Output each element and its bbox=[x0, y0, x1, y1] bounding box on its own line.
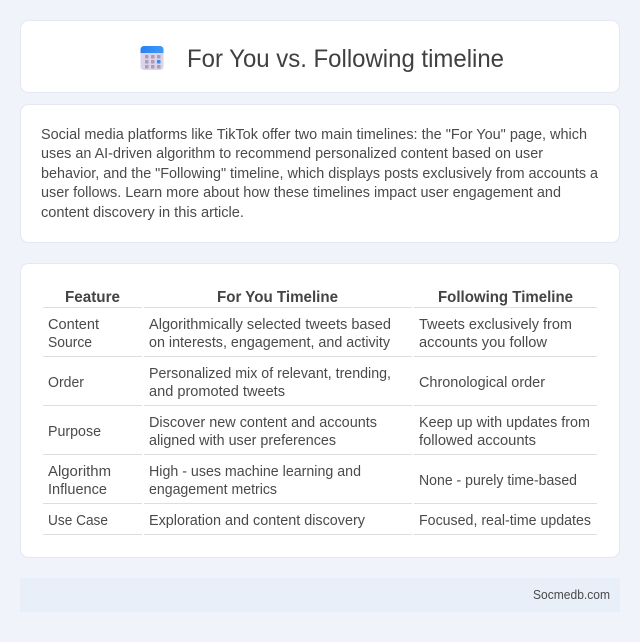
row: content source: Tweets exclusively from bbox=[419, 317, 572, 333]
row: content source: accounts you follow bbox=[419, 335, 548, 351]
row: purpose: Keep up with updates from bbox=[419, 415, 590, 431]
row: order: Personalized mix of relevant, trending, bbox=[149, 366, 391, 382]
description text: Social media platforms like TikTok offer two main timelines: the "For You" page, which bbox=[41, 126, 587, 143]
row: content source: Source bbox=[48, 335, 92, 351]
row: use case: Use Case bbox=[48, 513, 108, 529]
row: algorithm influence: engagement metrics bbox=[149, 482, 277, 498]
description text bbox=[41, 126, 599, 221]
footer: Socmedb.com bbox=[533, 588, 610, 602]
row: algorithm influence: Algorithm bbox=[48, 464, 111, 480]
row: purpose: followed accounts bbox=[419, 433, 536, 449]
row: order bbox=[48, 366, 545, 400]
description text: content discovery in this article. bbox=[41, 204, 244, 221]
icon: calendar bbox=[140, 46, 164, 70]
row: purpose: Discover new content and accounts bbox=[149, 415, 377, 431]
description text: behavior, and the "Following" timeline, which displays posts exclusively from accounts a bbox=[41, 165, 599, 182]
row: content source: on interests, engagement, and activity bbox=[149, 335, 391, 351]
table header bbox=[65, 289, 573, 306]
row: algorithm influence: None - purely time-based bbox=[419, 473, 577, 489]
row: order: Order bbox=[48, 375, 84, 391]
panel: description bbox=[20, 104, 620, 242]
description text: user follows. Learn more about how these timelines impact user engagement and bbox=[41, 184, 561, 201]
row: purpose: aligned with user preferences bbox=[149, 433, 336, 449]
panel: title card bbox=[20, 20, 620, 92]
row: use case bbox=[48, 513, 591, 529]
row: purpose bbox=[48, 415, 590, 449]
title: For You vs. Following timeline bbox=[187, 45, 504, 73]
row: algorithm influence bbox=[48, 464, 577, 498]
row: purpose: Purpose bbox=[48, 424, 101, 440]
table header: For You Timeline bbox=[217, 289, 338, 306]
row: algorithm influence: Influence bbox=[48, 482, 107, 498]
row: order: and promoted tweets bbox=[149, 384, 285, 400]
footer bbox=[20, 578, 620, 612]
row: content source bbox=[48, 317, 572, 351]
row: order: Chronological order bbox=[419, 375, 545, 391]
row: use case: Exploration and content discovery bbox=[149, 513, 366, 529]
row: algorithm influence: High - uses machine learning and bbox=[149, 464, 361, 480]
panel: comparison table bbox=[20, 264, 620, 558]
row: content source: Content bbox=[48, 317, 99, 333]
table header: Following Timeline bbox=[438, 289, 573, 306]
description text: uses an AI-driven algorithm to recommend personalized content based on user bbox=[41, 145, 543, 162]
row: content source: Algorithmically selected tweets based bbox=[149, 317, 391, 333]
row: use case: Focused, real-time updates bbox=[419, 513, 591, 529]
table header: Feature bbox=[65, 289, 120, 306]
